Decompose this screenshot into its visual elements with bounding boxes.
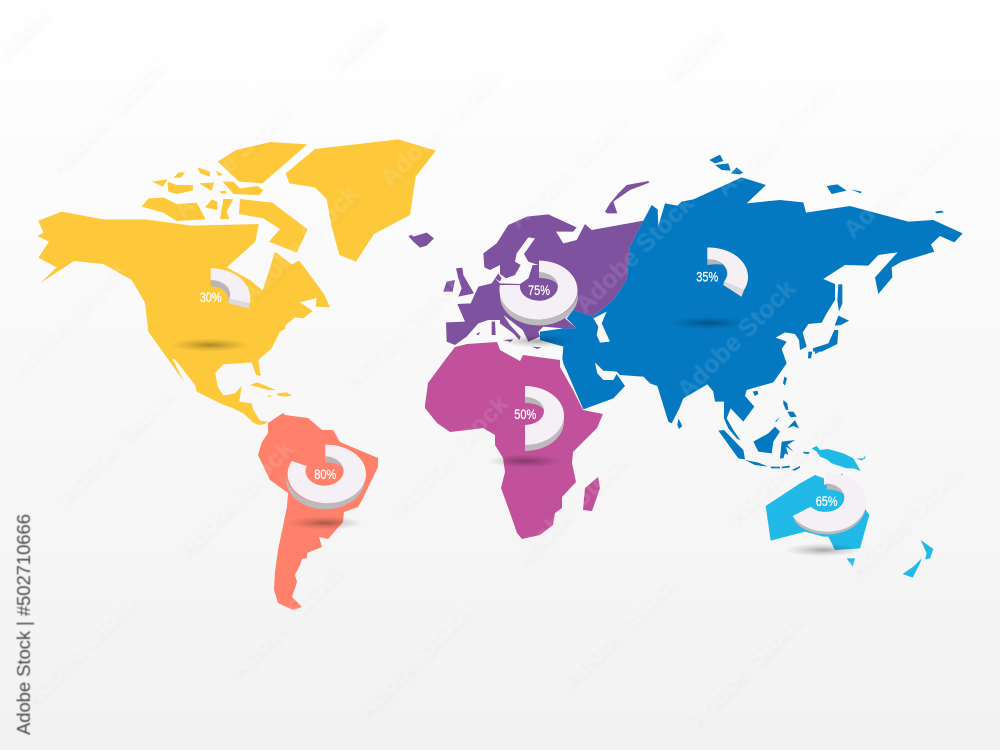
donut chart: Africa 50% xyxy=(514,386,564,451)
donut chart: Africa 50%: 50% xyxy=(514,406,536,422)
donut chart: Europe 75% xyxy=(499,260,578,326)
donut chart: South America 80%: 80% xyxy=(314,466,336,482)
watermark pattern: Adobe Stock xyxy=(337,265,466,394)
islands: Southeast Asia xyxy=(718,400,810,471)
donut chart: Oceania 65% xyxy=(793,473,866,535)
watermark pattern: Adobe Stock xyxy=(385,390,514,519)
donut chart: Europe 75%: 75% xyxy=(528,282,550,298)
watermark pattern: Adobe Stock xyxy=(838,115,967,244)
donut chart: Oceania 65%: 65% xyxy=(816,493,838,509)
watermark pattern: Adobe Stock xyxy=(710,73,839,202)
watermark pattern: Adobe Stock xyxy=(555,565,684,694)
watermark pattern: Adobe Stock xyxy=(15,585,144,714)
watermark pattern: Adobe Stock xyxy=(680,605,809,734)
watermark pattern: Adobe xyxy=(324,6,393,75)
watermark pattern: Adobe Stock xyxy=(50,380,179,509)
donut chart: North America 30% xyxy=(200,268,250,308)
continent: Oceania xyxy=(766,446,933,578)
watermark pattern: Adobe Stock xyxy=(235,180,364,309)
shadow: Europe xyxy=(500,334,576,348)
shadow: Oceania xyxy=(785,544,861,556)
shadow: Asia xyxy=(670,316,746,330)
shadow: North America xyxy=(170,338,250,352)
donut chart: North America 30%: 30% xyxy=(200,289,222,305)
watermark pattern: Adobe Stock xyxy=(350,595,479,724)
continent: Africa and Madagascar xyxy=(425,342,603,539)
watermark pattern: Adobe xyxy=(659,16,728,85)
shadow: South America xyxy=(287,516,363,530)
watermark pattern: Adobe Stock xyxy=(375,63,504,192)
watermark pattern: Adobe Stock xyxy=(168,95,297,224)
watermark pattern: Adobe Stock xyxy=(222,555,351,684)
watermark pattern: Adobe Stock xyxy=(840,455,969,584)
watermark pattern: Adobe Stock xyxy=(503,105,632,234)
watermark pattern: Adobe Stock xyxy=(40,53,169,182)
watermark pattern: Adobe Stock xyxy=(720,400,849,529)
stock id caption: Adobe Stock | #502710666 xyxy=(13,514,34,735)
donut chart: Asia 35% xyxy=(696,247,748,297)
continent: South America xyxy=(258,413,378,610)
continent: Europe xyxy=(408,181,649,349)
watermark pattern: Adobe Stock xyxy=(570,190,699,319)
continent: North America and Greenland xyxy=(37,139,436,425)
watermark pattern: Adobe Stock xyxy=(170,435,299,564)
watermark pattern: Adobe Stock xyxy=(672,275,801,404)
donut chart: South America 80% xyxy=(286,445,366,509)
watermark pattern: Adobe Stock xyxy=(2,255,131,384)
watermark pattern: Adobe Stock xyxy=(505,445,634,574)
continent: Asia xyxy=(540,155,963,441)
donut chart: Asia 35%: 35% xyxy=(696,268,718,284)
shadow: Africa xyxy=(487,454,563,468)
